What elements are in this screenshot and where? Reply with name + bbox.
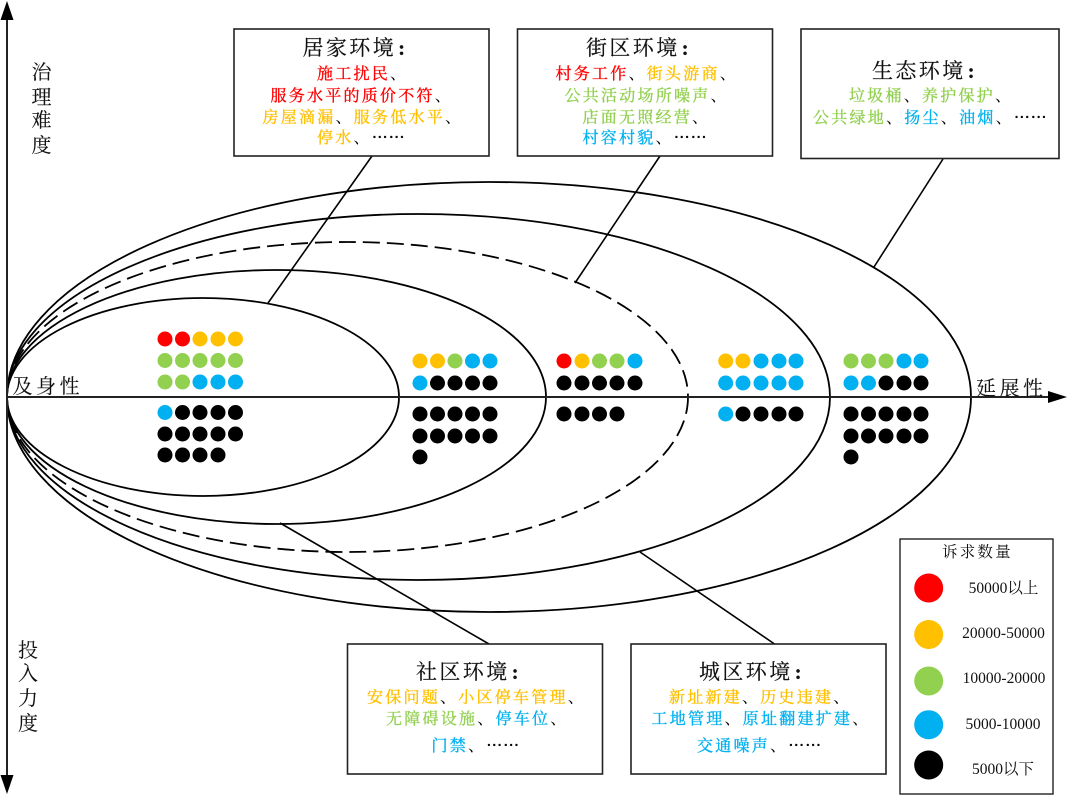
axis label: difficulty: 理 [32,87,52,109]
horizontal axis arrow [7,391,1067,403]
axis label: extensibility: 延展性 [976,377,1046,400]
text block: home issues: 施工扰民、 [317,65,408,83]
legend [900,539,1053,794]
leader lines [268,156,943,645]
ellipse: home environment [7,298,399,496]
heading: urban environment: 城区环境: [699,660,804,684]
axis label: difficulty: 难 [32,109,52,132]
panel: street environment [518,29,772,156]
legend item: over 50000 [914,574,1038,602]
text block: ecological issues [813,87,1047,128]
text block: community issues [367,688,586,756]
panel: home environment [234,29,489,156]
text block: urban issues: 工地管理、原址翻建扩建、 [652,709,871,728]
text block: home issues: 服务水平的质价不符、 [270,87,453,105]
text block: community issues: 安保问题、小区停车管理、 [367,688,586,706]
legend item: 5000-10000 [914,710,1041,739]
axis label: investment: 入 [18,662,38,685]
text block: home issues [262,65,463,148]
heading: home environment: 居家环境: [302,36,408,60]
ellipse: community environment [7,270,546,524]
nested ellipses [7,182,971,612]
ellipse: ecological environment [7,182,971,612]
legend item: under 5000: 5000以下 [972,760,1034,778]
dot group: street environment [556,354,642,422]
legend item: 20000-50000: 20000-50000 [962,625,1045,642]
axis label: difficulty [32,61,52,157]
ellipse: street environment (dashed) [7,242,688,552]
text block: community issues: 门禁、…… [432,733,520,756]
dot group: urban environment [718,354,804,422]
axis label: accessibility: 及身性 [12,375,83,398]
text block: street issues: 公共活动场所噪声、 [564,86,729,105]
dot group: community environment [412,354,498,464]
text block: home issues: 停水、…… [317,125,405,148]
text block: urban issues: 新址新建、历史违建、 [669,688,852,706]
heading: street environment: 街区环境: [586,36,691,60]
panel: urban environment [631,644,886,774]
axis label: difficulty: 治 [32,61,52,84]
text block: ecological issues: 公共绿地、扬尘、油烟、…… [813,105,1047,128]
axis label: investment: 投 [18,639,38,662]
dot group: home environment [158,332,243,462]
heading: ecological environment: 生态环境: [872,59,977,83]
text block: urban issues: 交通噪声、…… [697,733,822,756]
axis label: difficulty: 度 [32,134,52,157]
heading: community environment: 社区环境: [416,660,521,684]
text block: urban issues [652,688,871,756]
legend item: 5000-10000: 5000-10000 [966,716,1041,733]
legend item: 10000-20000 [914,666,1046,696]
text block: street issues: 店面无照经营、 [582,108,710,126]
axis label: investment: 度 [18,712,38,735]
text block: ecological issues: 垃圾桶、养护保护、 [849,87,1013,105]
text block: street issues: 村务工作、街头游商、 [556,65,738,83]
ellipse: urban environment [7,214,830,580]
legend item: 10000-20000: 10000-20000 [963,670,1046,687]
axis label: investment: 力 [18,687,38,710]
text block: street issues [556,65,738,148]
vertical axis arrow [0,1,14,794]
panel: ecological environment [801,29,1059,158]
text block: home issues: 房屋滴漏、服务低水平、 [262,108,463,126]
legend item: over 50000: 50000以上 [969,579,1038,597]
dot group: ecological environment [844,354,928,464]
panel: community environment [348,644,602,774]
text block: community issues: 无障碍设施、停车位、 [386,710,569,728]
legend item: 20000-50000 [914,620,1045,649]
text block: street issues: 村容村貌、…… [582,125,707,148]
axis label: investment [18,639,38,735]
legend title: 诉求数量 [942,543,1013,561]
legend item: under 5000 [914,750,1034,780]
